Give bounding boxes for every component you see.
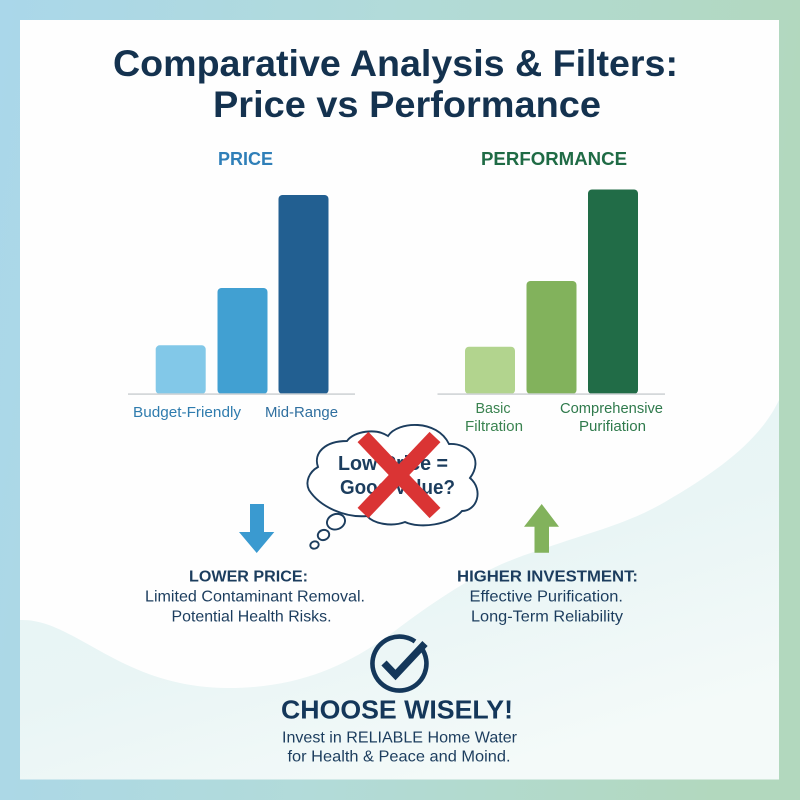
heading: price: PRICE: [218, 148, 273, 169]
text block: higher investment: Effective Purification.: [470, 589, 623, 606]
text block: lower price: LOWER PRICE:: [189, 569, 308, 586]
call to action text: [282, 730, 518, 766]
text block: lower price: Potential Health Risks.: [172, 609, 332, 626]
label: comprehensive purifiation: Comprehensive: [560, 400, 663, 417]
text block: higher investment: HIGHER INVESTMENT:: [457, 569, 638, 586]
call to action heading: CHOOSE WISELY!: [281, 694, 513, 724]
label: mid-range: Mid-Range: [265, 404, 338, 421]
label: budget-friendly: Budget-Friendly: [133, 404, 242, 421]
heading: performance: PERFORMANCE: [481, 148, 627, 169]
label: basic filtration: [465, 400, 523, 435]
title: Comparative Analysis & Filters:: [113, 43, 678, 84]
panel: price chart: [128, 148, 355, 421]
label: comprehensive purifiation: Purifiation: [579, 418, 646, 435]
text block: higher investment: [457, 569, 638, 626]
bar: middle performance: [526, 281, 576, 394]
bar: middle price: [218, 288, 268, 394]
label: basic filtration: Basic: [476, 400, 511, 417]
icon: check mark in circle: [372, 637, 426, 691]
red cross: [363, 437, 435, 513]
bar: basic filtration: [465, 347, 515, 394]
text block: lower price: Limited Contaminant Removal.: [145, 589, 365, 606]
bar: budget-friendly: [156, 345, 206, 394]
label: comprehensive purifiation: [560, 400, 663, 435]
thought bubble with crossed-out question: [307, 425, 478, 550]
question text: Good Value?: [340, 477, 455, 499]
text block: higher investment: Long-Term Reliability: [471, 609, 623, 626]
thought trail bubbles: [309, 511, 347, 550]
bar: comprehensive purification: [588, 190, 638, 394]
arrow: down: [239, 504, 274, 553]
cloud outline: [307, 425, 478, 525]
title: [113, 43, 678, 125]
label: basic filtration: Filtration: [465, 418, 523, 435]
call to action text: Invest in RELIABLE Home Water: [282, 730, 518, 747]
question text: Low Price =: [338, 453, 448, 475]
arrow: up: [524, 504, 559, 553]
panel: performance chart: [438, 148, 665, 435]
call to action text: for Health & Peace and Moind.: [288, 749, 510, 766]
question text: [338, 453, 455, 499]
bar: mid-range: [278, 195, 328, 394]
title: Price vs Performance: [213, 84, 601, 125]
text block: lower price: [145, 569, 365, 626]
